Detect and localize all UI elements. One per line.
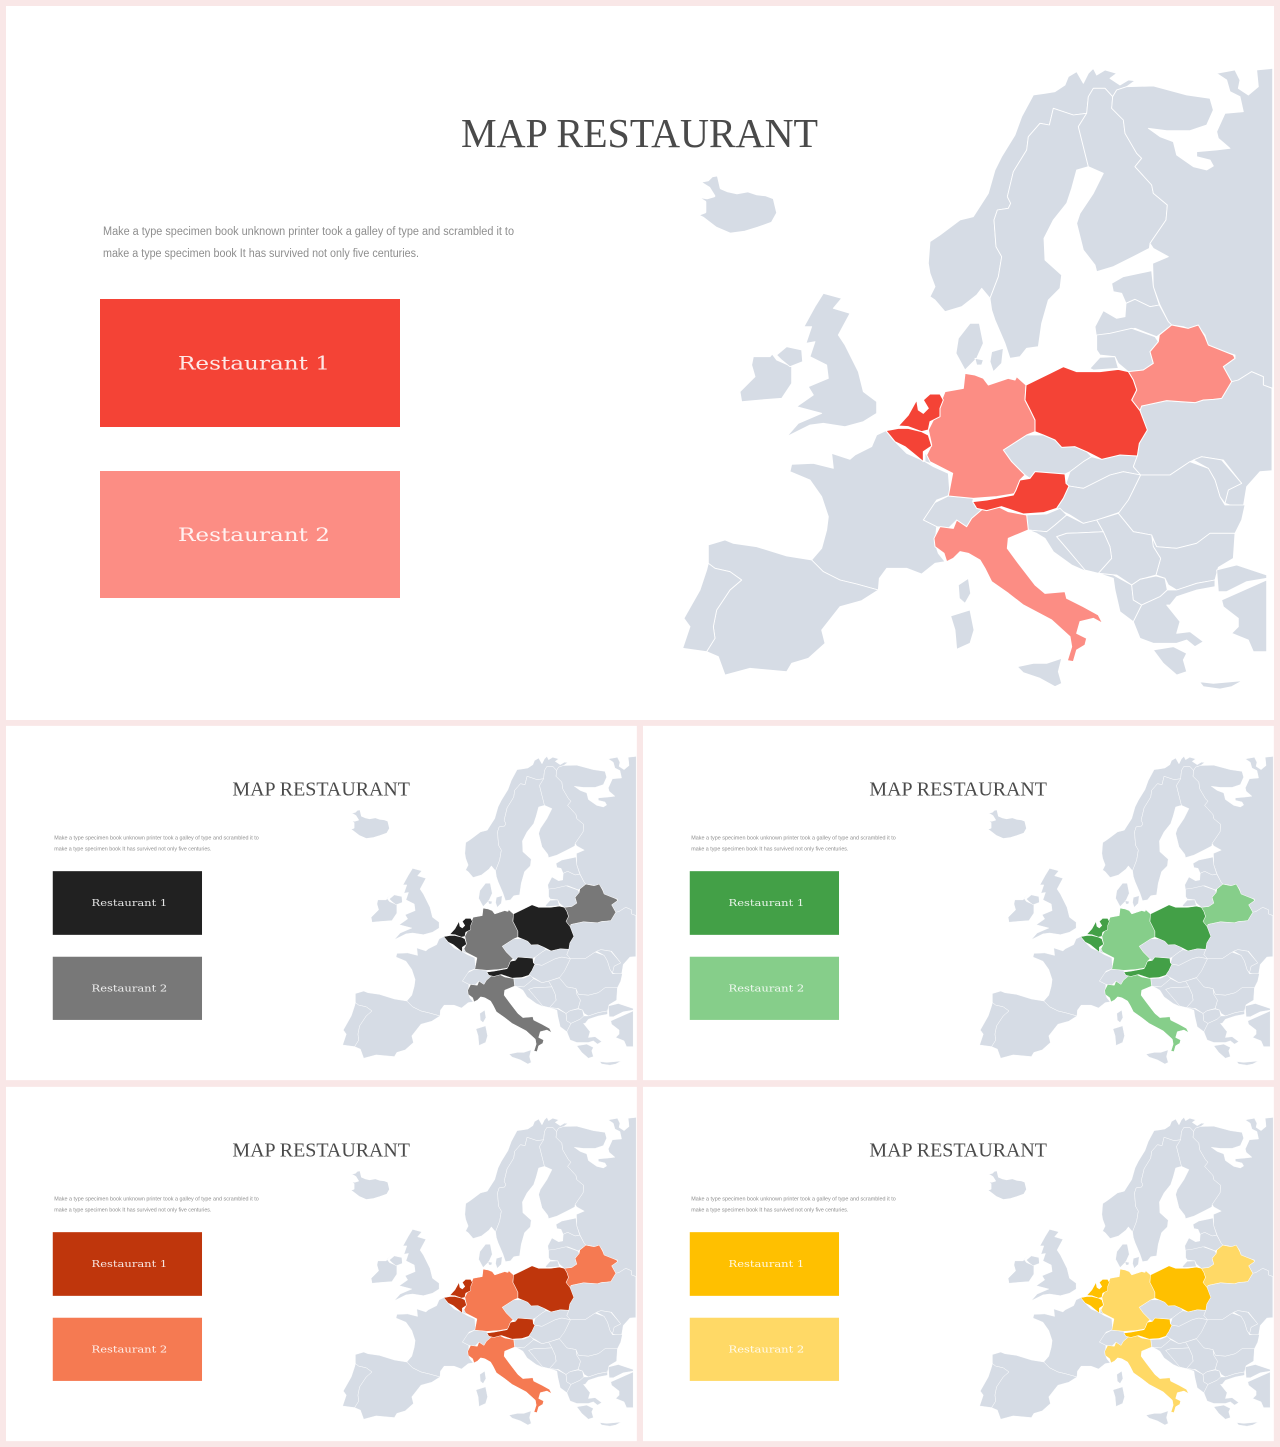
description text: make a type specimen book It has survived not only five centuries. [691, 1207, 849, 1213]
legend: restaurant 1: Restaurant 1 [92, 898, 167, 909]
panel: green slide [643, 726, 1274, 1080]
legend: restaurant 1 [53, 1232, 202, 1296]
legend: restaurant 2: Restaurant 2 [729, 1345, 804, 1356]
legend: restaurant 1: Restaurant 1 [729, 1259, 804, 1270]
description text [54, 1196, 259, 1213]
legend: restaurant 1: Restaurant 1 [729, 898, 804, 909]
panel: yellow slide [643, 1087, 1274, 1441]
legend: restaurant 2: Restaurant 2 [92, 1345, 167, 1356]
description text [103, 226, 514, 260]
description text: make a type specimen book It has survived not only five centuries. [54, 1207, 212, 1213]
map: Europe green [980, 756, 1273, 1065]
legend: restaurant 2 [53, 1318, 202, 1381]
legend: restaurant 2 [100, 471, 400, 598]
map: Europe yellow [980, 1117, 1273, 1426]
title: MAP RESTAURANT [869, 779, 1048, 801]
title: MAP RESTAURANT [232, 1140, 411, 1162]
legend: restaurant 2 [690, 1318, 839, 1381]
legend: restaurant 2 [53, 957, 202, 1020]
description text: make a type specimen book It has survived not only five centuries. [54, 846, 212, 852]
legend: restaurant 2: Restaurant 2 [729, 984, 804, 995]
title: MAP RESTAURANT [869, 1140, 1048, 1162]
description text: Make a type specimen book unknown printer took a galley of type and scrambled it to [54, 1196, 259, 1202]
description text [54, 835, 259, 852]
description text: Make a type specimen book unknown printer took a galley of type and scrambled it to [54, 835, 259, 841]
legend: restaurant 1 [690, 1232, 839, 1296]
legend: restaurant 1 [100, 299, 400, 427]
panel: main red slide [6, 6, 1274, 720]
map: Europe black [343, 756, 636, 1065]
description text [691, 1196, 896, 1213]
panel: black slide [6, 726, 637, 1080]
map: Europe orange [343, 1117, 636, 1426]
description text: make a type specimen book It has survived not only five centuries. [691, 846, 849, 852]
title: MAP RESTAURANT [232, 779, 411, 801]
map: Europe red [683, 68, 1273, 689]
legend: restaurant 1: Restaurant 1 [178, 352, 330, 374]
description text: Make a type specimen book unknown printer took a galley of type and scrambled it to [103, 226, 514, 238]
description text: Make a type specimen book unknown printer took a galley of type and scrambled it to [691, 1196, 896, 1202]
legend: restaurant 2 [690, 957, 839, 1020]
panel: orange slide [6, 1087, 637, 1441]
description text: make a type specimen book It has survived not only five centuries. [103, 248, 419, 260]
legend: restaurant 1 [53, 871, 202, 935]
title: MAP RESTAURANT [461, 110, 818, 156]
description text [691, 835, 896, 852]
legend: restaurant 1 [690, 871, 839, 935]
legend: restaurant 2: Restaurant 2 [178, 524, 330, 546]
description text: Make a type specimen book unknown printer took a galley of type and scrambled it to [691, 835, 896, 841]
legend: restaurant 2: Restaurant 2 [92, 984, 167, 995]
legend: restaurant 1: Restaurant 1 [92, 1259, 167, 1270]
